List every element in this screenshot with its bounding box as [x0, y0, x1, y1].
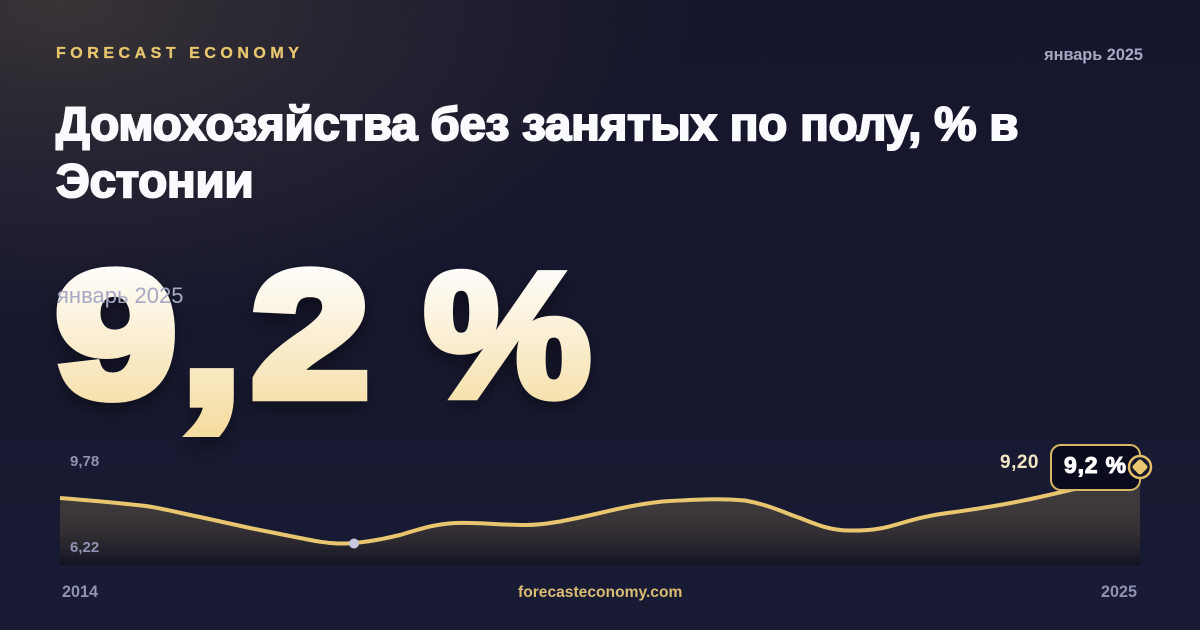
minimum marker — [349, 538, 359, 548]
latest value label: 9,20 — [1000, 452, 1039, 473]
title: Домохозяйства без занятых по полу, % в — [56, 98, 1018, 151]
website: forecasteconomy.com — [518, 584, 682, 601]
end year: 2025 — [1101, 583, 1137, 601]
title — [55, 98, 1018, 208]
brand label: FORECAST ECONOMY — [56, 45, 303, 62]
title: Эстонии — [56, 155, 254, 208]
area under line — [60, 467, 1140, 565]
date overlay on value: январь 2025 — [57, 283, 184, 308]
start year: 2014 — [62, 583, 98, 601]
big value: , — [181, 231, 242, 443]
value callout — [1051, 445, 1140, 490]
end marker — [1129, 456, 1151, 478]
max value label: 9,78 — [70, 453, 99, 470]
value callout: 9,2 % — [1064, 452, 1127, 478]
big value: 9 — [56, 235, 176, 433]
min value label: 6,22 — [70, 539, 99, 556]
date top right: январь 2025 — [1044, 46, 1143, 64]
trend line — [60, 467, 1140, 544]
big value: % — [424, 236, 591, 434]
big value: 2 — [252, 236, 369, 434]
